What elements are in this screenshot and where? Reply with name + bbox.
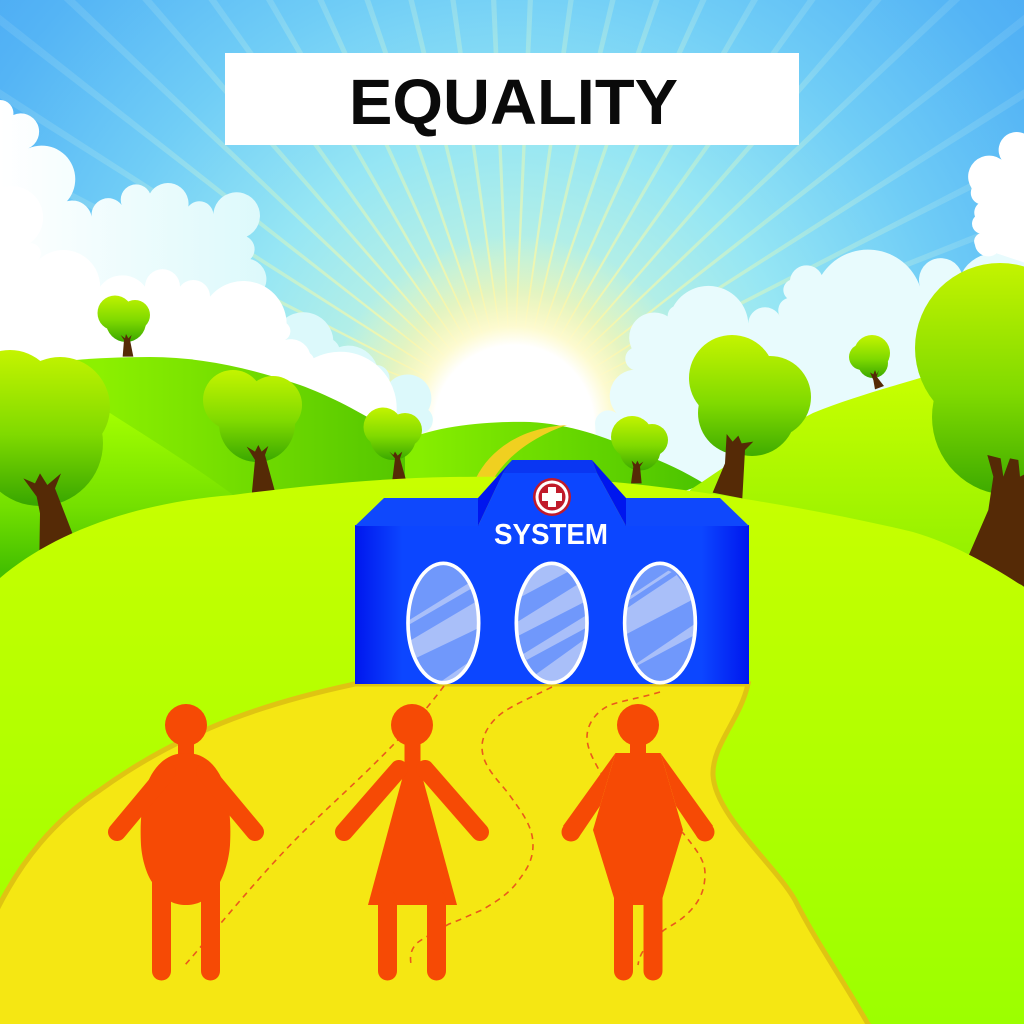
clouds left: [0, 100, 433, 433]
hill: left front wedge: [0, 405, 240, 600]
roof right wing: [626, 498, 749, 526]
label: SYSTEM: [494, 519, 608, 551]
window 3: [625, 563, 697, 683]
tree: small right: [849, 335, 890, 389]
path 3: [587, 692, 705, 965]
person 1: [117, 704, 255, 971]
roof left wing: [355, 498, 478, 526]
person 3: [562, 704, 714, 971]
tree: center left: [364, 408, 422, 480]
clouds right: [595, 132, 1024, 497]
road over far hill: [476, 425, 567, 478]
building: system: [355, 460, 749, 690]
window 1: [407, 563, 482, 690]
trees: [0, 263, 1024, 603]
tower face: [478, 473, 626, 526]
white upper cloud: [968, 132, 1024, 263]
sun rays: [0, 0, 1024, 425]
tree: center right: [611, 416, 668, 483]
foreground hill: [0, 477, 1024, 1024]
yellow road: [0, 684, 876, 1024]
title banner: EQUALITY: [349, 66, 678, 138]
hill: centre: [405, 422, 705, 520]
tree: far left: [0, 350, 110, 557]
tree: small hill: [98, 296, 150, 357]
hill: left back: [0, 357, 456, 600]
pale back cloud: [595, 250, 1024, 497]
white front cloud: [0, 186, 397, 433]
person 2: [344, 704, 480, 971]
sun: [324, 235, 704, 615]
hill: right: [690, 350, 1024, 640]
dashed paths: [185, 686, 705, 965]
window 2: [513, 557, 588, 687]
tree: mid left: [203, 370, 302, 495]
tree: far right: [915, 263, 1024, 603]
title banner: [225, 53, 799, 145]
tower top band: [503, 460, 597, 473]
path 2: [411, 687, 552, 964]
pale back cloud: [0, 100, 433, 433]
tower left side: [478, 460, 512, 526]
cross icon: [533, 478, 571, 516]
tower right side: [592, 460, 626, 526]
body: [355, 525, 749, 684]
tree: right mid: [689, 335, 811, 498]
path 1: [185, 686, 444, 965]
back hills: [0, 350, 1024, 640]
windows: [407, 557, 697, 690]
